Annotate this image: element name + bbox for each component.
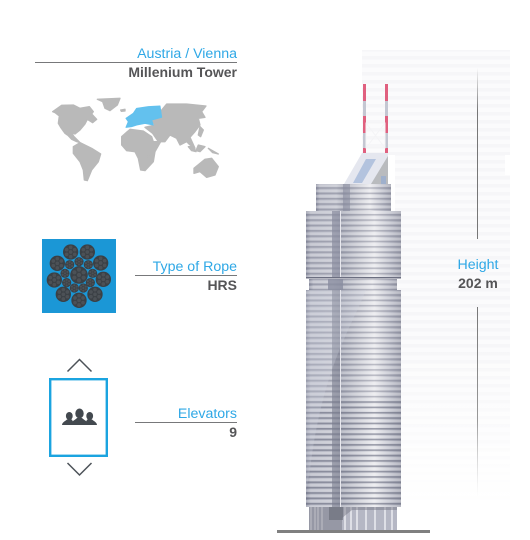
elevators label: Elevators: [178, 406, 237, 422]
rope label: [135, 259, 237, 293]
icon: people: [62, 408, 97, 425]
height label: 202 m: [458, 275, 498, 291]
top block: [316, 184, 391, 211]
heading: location: Millenium Tower: [128, 64, 238, 80]
map highlight: Europe: [126, 106, 162, 127]
rope label: HRS: [207, 277, 237, 293]
arrow: down: [68, 463, 92, 475]
arrow: up: [68, 360, 92, 372]
middle block: [306, 211, 401, 278]
crown: [344, 153, 388, 184]
heading: location: [35, 46, 238, 80]
antennas: [363, 84, 388, 153]
height label: Height: [457, 257, 499, 273]
main shaft: [306, 290, 401, 507]
tower: [277, 84, 430, 533]
faint tower reflection: [362, 50, 512, 510]
rope label: Type of Rope: [153, 259, 237, 275]
rope icon: [42, 239, 116, 313]
neck: [309, 279, 397, 290]
elevators label: 9: [229, 424, 237, 440]
height label: [457, 68, 499, 497]
world map: [53, 98, 218, 181]
elevators label: [135, 406, 237, 440]
base: [309, 507, 397, 530]
elevator icon: [50, 360, 107, 475]
ground line: [277, 530, 430, 533]
heading: location: Austria / Vienna: [137, 46, 237, 62]
